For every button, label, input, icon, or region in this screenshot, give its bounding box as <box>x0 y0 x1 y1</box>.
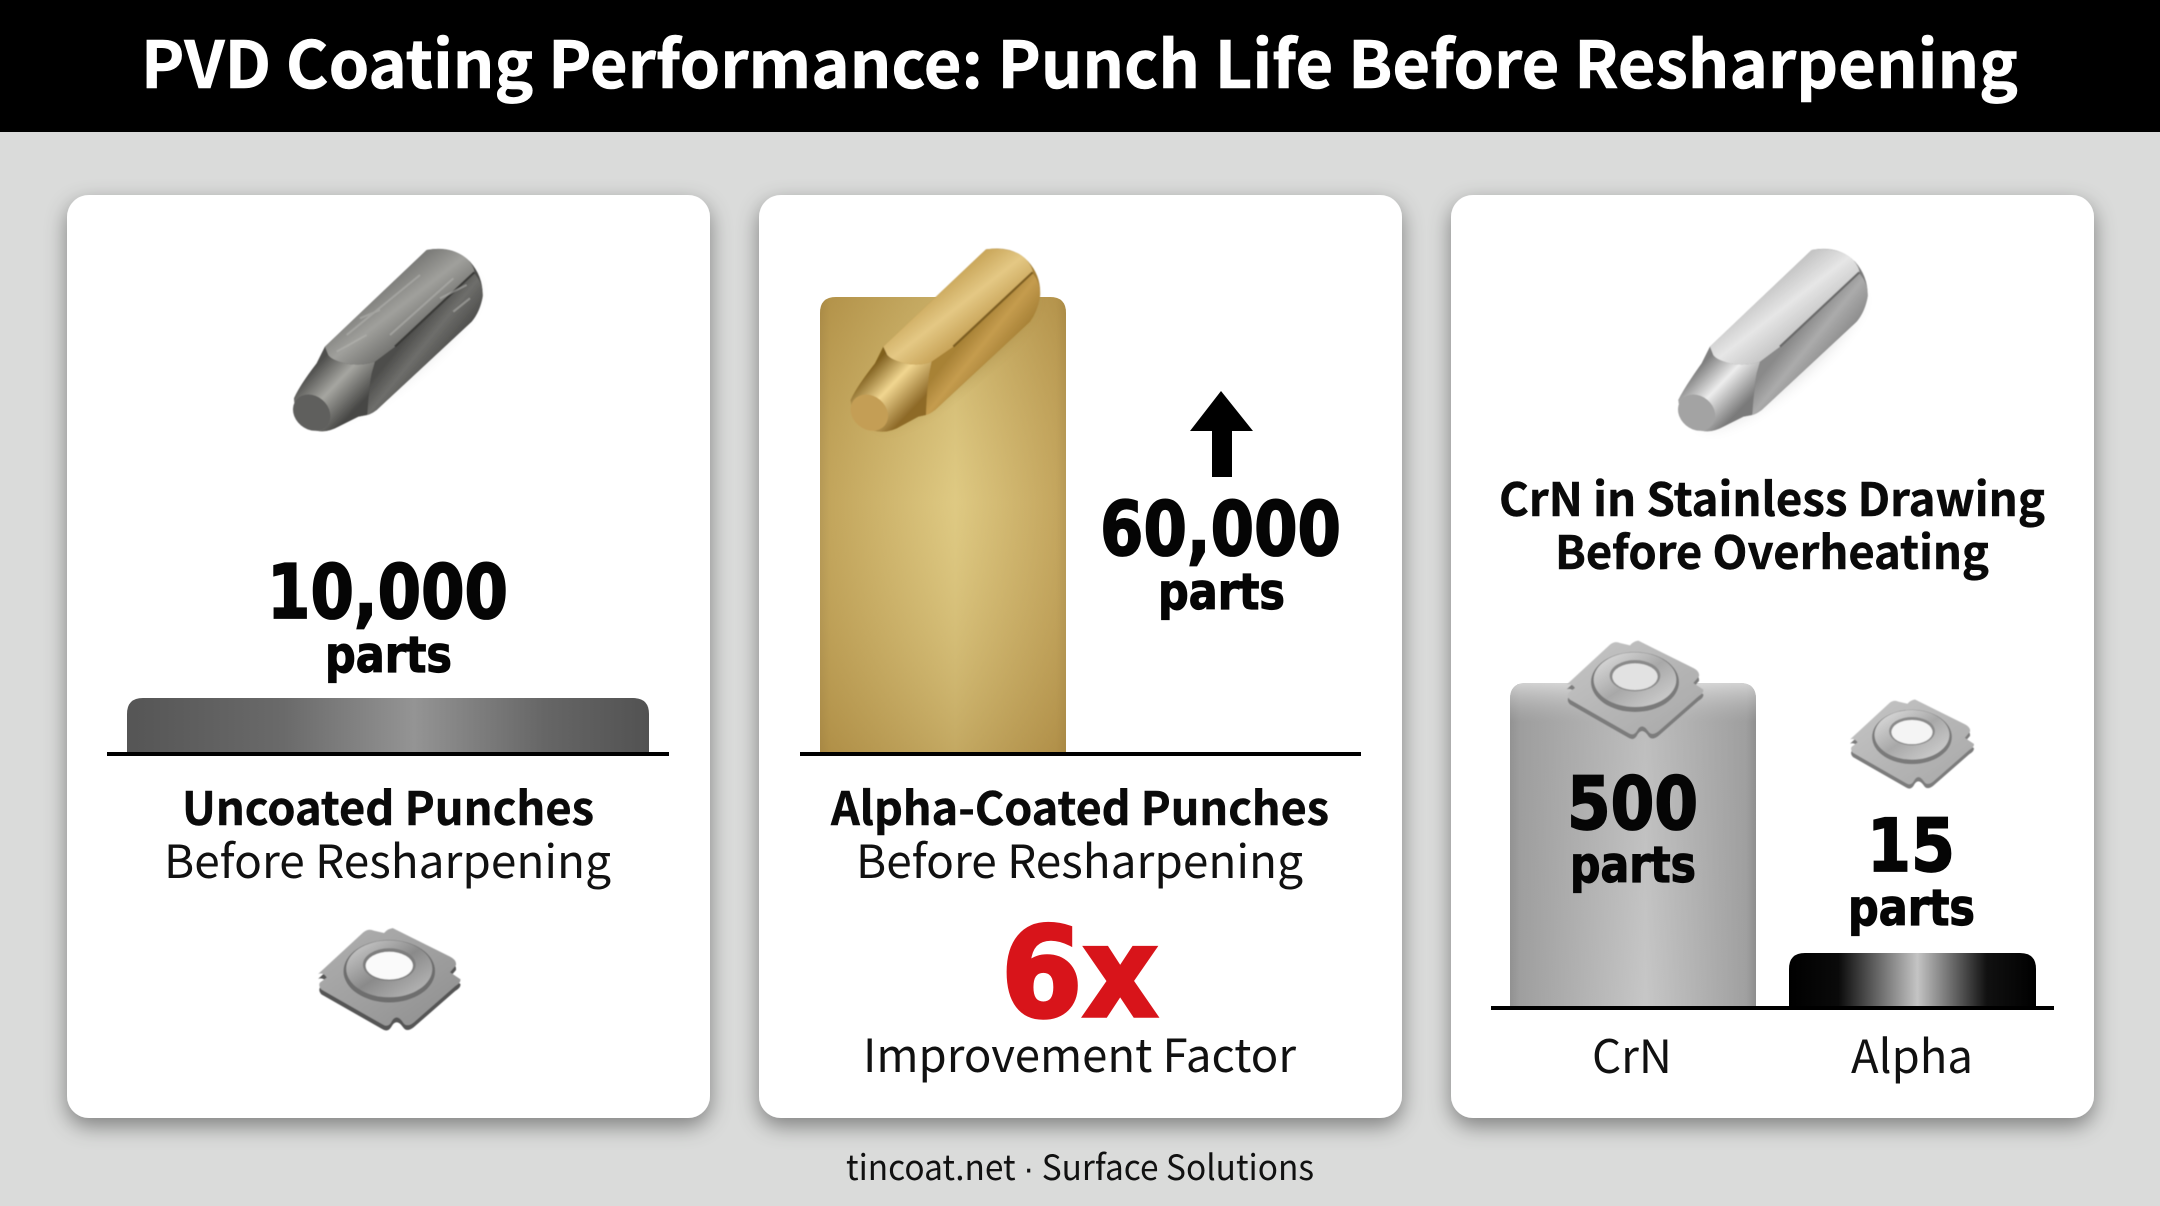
icon: washer above alpha bar <box>1850 699 1974 789</box>
bar: CrN <box>1510 683 1756 1008</box>
stat: 500 parts: parts <box>1570 836 1696 894</box>
stat: 60,000 parts <box>1100 485 1341 621</box>
panel: uncoated punches <box>67 195 710 1118</box>
label: CrN: CrN <box>1592 1021 1672 1087</box>
icon: CrN silver punch <box>1671 249 1872 441</box>
label: uncoated punches: Uncoated Punches <box>182 773 594 839</box>
callout: 6x improvement factor: Improvement Factor <box>863 1020 1296 1086</box>
stat: 10,000 parts: parts <box>325 626 452 684</box>
bar: alpha <box>1789 953 2036 1008</box>
stat: 15 parts: 15 <box>1867 804 1955 889</box>
stat: 10,000 parts <box>267 548 508 684</box>
stat: 500 parts: 500 <box>1567 762 1698 847</box>
header band <box>0 0 2160 132</box>
title: PVD Coating Performance: Punch Life Before Resharpening <box>141 13 2018 107</box>
label: uncoated punches <box>164 773 611 892</box>
panel: CrN in stainless drawing <box>1451 195 2094 1118</box>
label: alpha-coated punches: Before Resharpening <box>856 826 1303 892</box>
label: alpha-coated punches: Alpha-Coated Punches <box>830 773 1329 839</box>
icon: washer on CrN bar <box>1567 641 1703 739</box>
icon: gold punch <box>843 248 1042 438</box>
label: uncoated punches: Before Resharpening <box>164 826 611 892</box>
callout: 6x improvement factor: 6x <box>1001 901 1158 1046</box>
label: Alpha: Alpha <box>1851 1021 1973 1087</box>
heading: CrN in stainless drawing: CrN in Stainless Drawing <box>1499 464 2045 530</box>
bar: uncoated <box>127 698 649 753</box>
heading: CrN in stainless drawing: Before Overheating <box>1555 517 1989 583</box>
stat: 60,000 parts: 60,000 <box>1100 485 1341 573</box>
footer credit: tincoat.net · Surface Solutions <box>846 1140 1314 1191</box>
panel: alpha-coated punches <box>759 195 1402 1118</box>
icon: worn uncoated punch <box>286 249 489 438</box>
label: alpha-coated punches <box>830 773 1329 892</box>
stat: 500 parts <box>1567 762 1698 894</box>
callout: 6x improvement factor <box>863 901 1296 1086</box>
icon: washer part <box>318 928 460 1031</box>
stat: 15 parts: parts <box>1848 879 1975 937</box>
heading: CrN in stainless drawing <box>1499 464 2045 583</box>
stat: 15 parts <box>1848 804 1975 937</box>
stat: 10,000 parts: 10,000 <box>267 548 508 636</box>
stat: 60,000 parts: parts <box>1158 563 1285 621</box>
arrow: up <box>1190 391 1253 477</box>
bar: alpha-coated gold <box>820 297 1066 753</box>
